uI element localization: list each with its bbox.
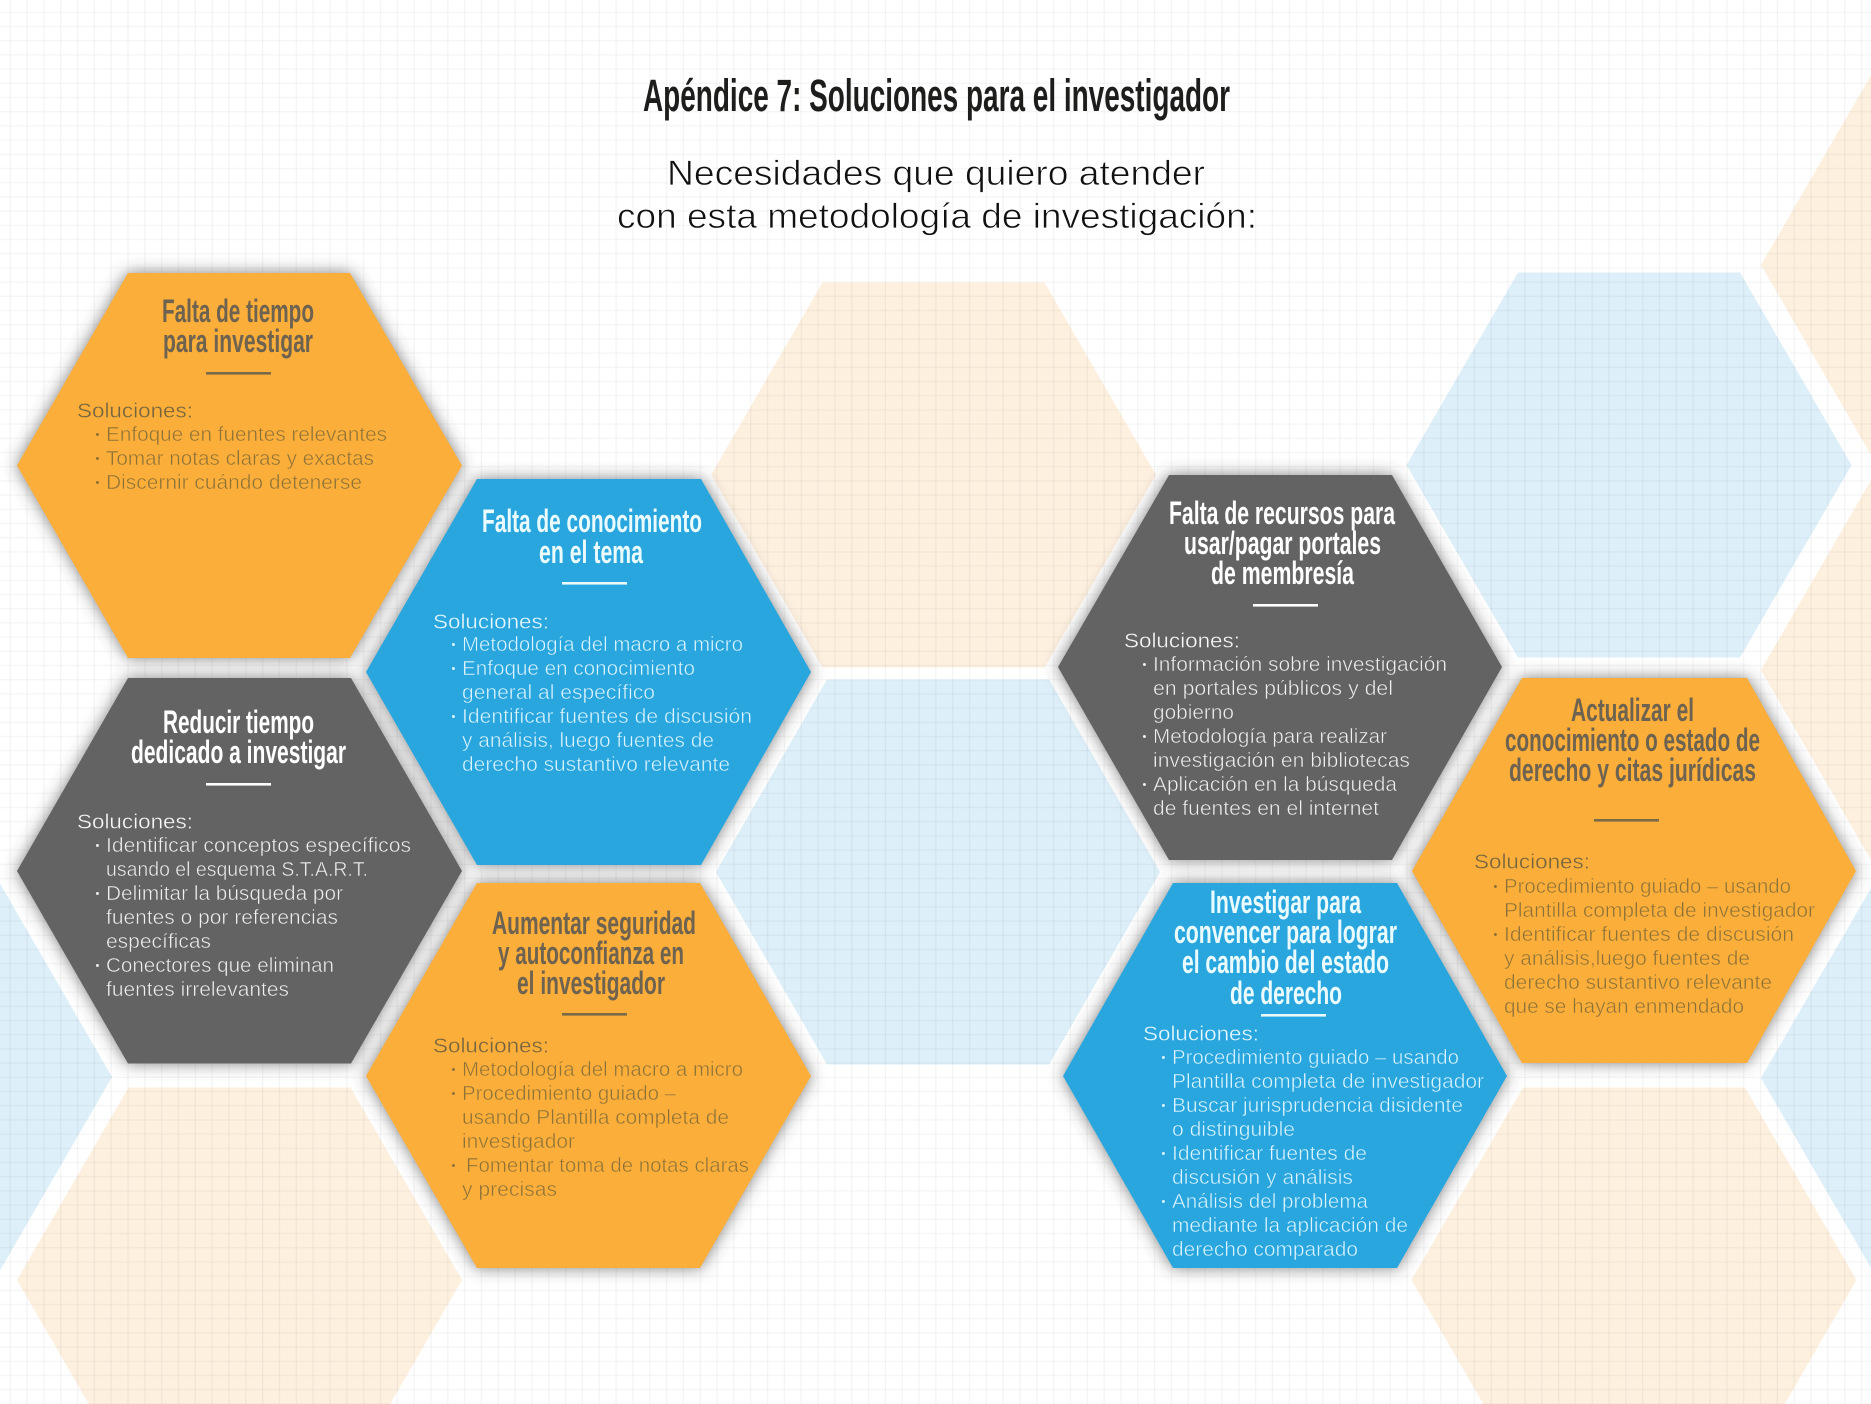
solutions list — [1124, 631, 1447, 820]
solutions list: y análisis,luego fuentes de — [1504, 948, 1750, 970]
heading — [1505, 692, 1760, 788]
solutions list — [1474, 852, 1815, 1018]
solutions list: Análisis del problema — [1172, 1191, 1369, 1213]
solutions list: derecho sustantivo relevante — [462, 754, 730, 776]
heading: el investigador — [517, 965, 665, 1001]
solutions list: Delimitar la búsqueda por — [106, 883, 343, 905]
heading: de derecho — [1230, 975, 1342, 1011]
solutions list: • — [452, 1088, 456, 1100]
solutions list: gobierno — [1153, 702, 1234, 724]
solutions list: investigación en bibliotecas — [1153, 750, 1410, 772]
solutions list: Metodología del macro a micro — [462, 1059, 743, 1081]
solutions list: • — [96, 477, 100, 489]
heading: Investigar para — [1210, 884, 1361, 920]
title: Apéndice 7: Soluciones para el investigador — [643, 70, 1230, 121]
solutions list: de fuentes en el internet — [1153, 798, 1379, 820]
solutions list: • — [1162, 1148, 1166, 1160]
solutions list: en portales públicos y del — [1153, 678, 1393, 700]
heading — [162, 293, 314, 359]
solutions list: Metodología para realizar — [1153, 726, 1387, 748]
solutions list: fuentes o por referencias — [106, 907, 338, 929]
solutions list: o distinguible — [1172, 1119, 1295, 1141]
heading: dedicado a investigar — [131, 734, 346, 770]
solutions list: que se hayan enmendado — [1504, 996, 1744, 1018]
heading: de membresía — [1211, 555, 1354, 591]
panel: Falta de recursos para usar/pagar portales de membresía — [1058, 475, 1502, 860]
solutions list: • — [452, 663, 456, 675]
heading: Aumentar seguridad — [492, 905, 696, 941]
panel: Actualizar el conocimiento o estado de derecho y citas jurídicas — [1412, 678, 1856, 1063]
panel: Reducir tiempo dedicado a investigar — [17, 678, 462, 1064]
solutions list: Información sobre investigación — [1153, 654, 1447, 676]
solutions list: investigador — [462, 1131, 575, 1153]
solutions list: • — [452, 711, 456, 723]
solutions list: • — [1494, 881, 1498, 893]
solutions list: • — [452, 1064, 456, 1076]
solutions list: Procedimiento guiado – usando — [1504, 876, 1791, 898]
panel: Falta de tiempo para investigar — [17, 273, 462, 658]
solutions list: • — [1142, 779, 1146, 791]
solutions list: • — [96, 960, 100, 972]
subtitle: Necesidades que quiero atender — [667, 154, 1205, 193]
solutions list: Conectores que eliminan — [106, 955, 334, 977]
heading: en el tema — [539, 534, 643, 570]
heading: convencer para lograr — [1174, 914, 1397, 950]
solutions list: • — [452, 1160, 456, 1172]
solutions list: • — [96, 429, 100, 441]
solutions list: • — [1142, 731, 1146, 743]
solutions list — [1143, 1024, 1484, 1261]
solutions list: derecho sustantivo relevante — [1504, 972, 1772, 994]
solutions list: Procedimiento guiado – — [462, 1083, 677, 1105]
solutions list — [77, 401, 387, 494]
heading: el cambio del estado — [1182, 944, 1389, 980]
heading: Falta de conocimiento — [482, 503, 702, 539]
subtitle — [617, 154, 1257, 236]
solutions list: Buscar jurisprudencia disidente — [1172, 1095, 1463, 1117]
solutions list: Soluciones: — [433, 1036, 549, 1058]
solutions list: • — [96, 840, 100, 852]
solutions list: y precisas — [462, 1179, 557, 1201]
heading — [131, 704, 346, 770]
panel: Falta de conocimiento en el tema — [366, 479, 811, 865]
solutions list: Metodología del macro a micro — [462, 634, 743, 656]
heading — [492, 905, 696, 1001]
solutions list: Fomentar toma de notas claras — [466, 1155, 749, 1177]
solutions list: Soluciones: — [77, 812, 193, 834]
solutions list: • — [96, 888, 100, 900]
solutions list: general al específico — [462, 682, 655, 704]
solutions list: y análisis, luego fuentes de — [462, 730, 714, 752]
solutions list: discusión y análisis — [1172, 1167, 1353, 1189]
solutions list: Aplicación en la búsqueda — [1153, 774, 1398, 796]
solutions list: • — [1162, 1052, 1166, 1064]
heading: Falta de tiempo — [162, 293, 314, 329]
solutions list: • — [1162, 1100, 1166, 1112]
heading: Actualizar el — [1571, 692, 1694, 728]
solutions list: Identificar fuentes de — [1172, 1143, 1367, 1165]
solutions list: mediante la aplicación de — [1172, 1215, 1408, 1237]
panel: Aumentar seguridad y autoconfianza en el investigador — [366, 883, 811, 1268]
heading — [1174, 884, 1397, 1011]
solutions list — [433, 1036, 749, 1201]
solutions list: Enfoque en fuentes relevantes — [106, 424, 387, 446]
solutions list: Plantilla completa de investigador — [1172, 1071, 1484, 1093]
solutions list: Soluciones: — [1124, 631, 1240, 653]
panel: Investigar para convencer para lograr el cambio del estado de derecho — [1063, 883, 1507, 1268]
solutions list: Enfoque en conocimiento — [462, 658, 695, 680]
solutions list: • — [1162, 1196, 1166, 1208]
solutions list: Identificar fuentes de discusión — [462, 706, 752, 728]
solutions list — [77, 812, 411, 1001]
solutions list: Soluciones: — [433, 612, 549, 634]
heading: usar/pagar portales — [1184, 525, 1381, 561]
solutions list: específicas — [106, 931, 211, 953]
heading: para investigar — [163, 323, 313, 359]
solutions list: Tomar notas claras y exactas — [106, 448, 374, 470]
solutions list: Soluciones: — [1143, 1024, 1259, 1046]
heading — [1169, 495, 1395, 591]
solutions list: usando Plantilla completa de — [462, 1107, 729, 1129]
solutions list: • — [96, 453, 100, 465]
heading: y autoconfianza en — [498, 935, 684, 971]
solutions list: derecho comparado — [1172, 1239, 1358, 1261]
solutions list: usando el esquema S.T.A.R.T. — [106, 859, 368, 881]
heading: Reducir tiempo — [163, 704, 314, 740]
solutions list: • — [452, 639, 456, 651]
solutions list: Identificar fuentes de discusión — [1504, 924, 1794, 946]
subtitle: con esta metodología de investigación: — [617, 197, 1257, 236]
solutions list: Plantilla completa de investigador — [1504, 900, 1815, 922]
solutions list: • — [1494, 929, 1498, 941]
solutions list: fuentes irrelevantes — [106, 979, 289, 1001]
solutions list — [433, 612, 752, 776]
solutions list: Procedimiento guiado – usando — [1172, 1047, 1459, 1069]
solutions list: Identificar conceptos específicos — [106, 835, 411, 857]
solutions list: Discernir cuándo detenerse — [106, 472, 362, 494]
solutions list: Soluciones: — [1474, 852, 1590, 874]
heading — [482, 503, 702, 570]
solutions list: Soluciones: — [77, 401, 193, 423]
solutions list: • — [1142, 659, 1146, 671]
heading: Falta de recursos para — [1169, 495, 1395, 531]
